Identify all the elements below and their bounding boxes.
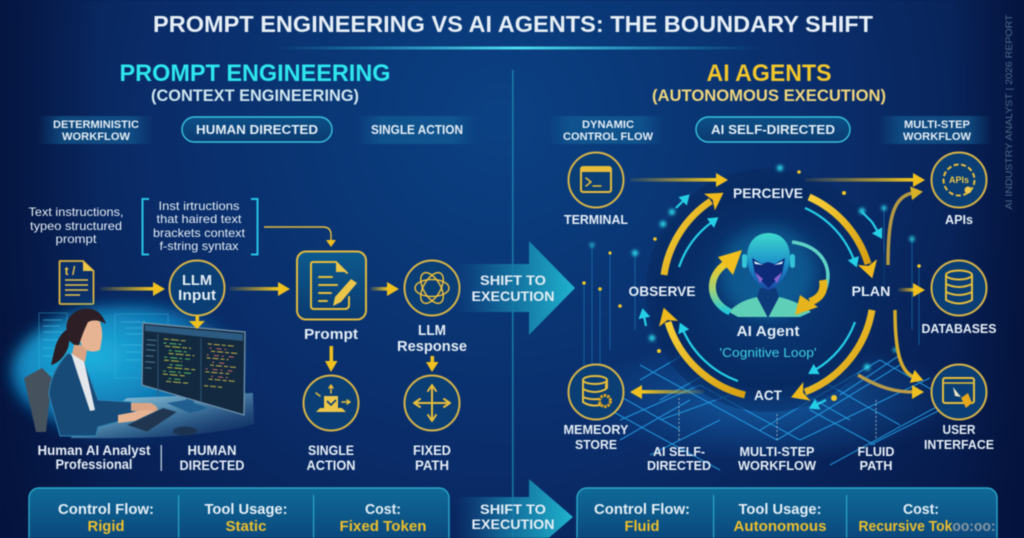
label: act: ACT (754, 387, 782, 403)
node: prompt (297, 252, 366, 343)
arrow: shift to execution: EXECUTION (472, 289, 554, 304)
tag: deterministic workflow: WORKFLOW (62, 131, 131, 143)
node: single action (304, 376, 358, 430)
metric: control flow: Fluid (624, 519, 660, 535)
node: databases (922, 260, 996, 336)
metric: control flow: Control Flow: (58, 502, 154, 518)
label: user interface: USER (942, 423, 976, 437)
labels: right column captions: PATH (860, 459, 892, 473)
arrow: act to memory store (630, 385, 704, 399)
text: typed instructions note: typeo structured (30, 219, 122, 233)
node: user interface (924, 364, 994, 452)
arrow: lower shift to execution: SHIFT TO (480, 502, 546, 517)
label: plan: PLAN (852, 283, 890, 299)
labels: left column captions: Professional (56, 457, 132, 472)
arrow: shift to execution (456, 241, 575, 335)
arrow: llm input to prompt (229, 282, 290, 296)
labels: left column captions (38, 443, 451, 473)
monitor (142, 323, 245, 415)
panel: right summary (577, 488, 997, 538)
chair (24, 368, 52, 432)
metric: tool usage: Tool Usage: (204, 502, 288, 518)
node: memory store (564, 364, 629, 452)
labels: left column captions: PATH (415, 458, 449, 473)
arrow: llm input to analyst (189, 316, 205, 329)
heading: prompt engineering: PROMPT ENGINEERING (120, 60, 390, 87)
arrow: agent swirl right (792, 242, 828, 290)
dotted leader lines (679, 398, 876, 440)
metric: control flow: Control Flow: (594, 502, 690, 518)
labels: right column captions: DIRECTED (647, 459, 711, 473)
metric: tool usage: Tool Usage: (738, 502, 822, 518)
data dots (582, 165, 921, 405)
arrow: prompt to llm response (370, 282, 399, 296)
subheading: context engineering: (CONTEXT ENGINEERING) (151, 86, 359, 105)
panel: ai agents header (548, 60, 992, 144)
node: llm response (397, 260, 467, 355)
arrow: plan to databases (898, 283, 925, 297)
labels: right column captions: AI SELF- (653, 445, 705, 459)
metric: control flow (594, 502, 690, 535)
subheading: autonomous execution: (AUTONOMOUS EXECUTION) (652, 86, 886, 105)
node: fixed path (404, 376, 460, 430)
metric: control flow: Rigid (88, 519, 124, 535)
arrow: plan to user interface (895, 310, 914, 377)
panel: cognitive loop (628, 168, 890, 412)
icon: document (60, 261, 94, 304)
ponytail (51, 327, 72, 365)
icon: document: t / (65, 264, 76, 278)
label: memory store: MEMEORY (564, 423, 629, 437)
panel: prompt engineering header (38, 60, 476, 144)
callout: bracketed instructions: f-string syntax (160, 239, 238, 253)
label: perceive: PERCEIVE (733, 185, 803, 201)
labels: left column captions: DIRECTED (180, 458, 245, 473)
arrow: plan to apis (888, 193, 913, 265)
label: observe: OBSERVE (628, 283, 696, 299)
node: llm response: Response (397, 339, 467, 355)
arrow: plan to act (805, 310, 872, 392)
text: typed instructions note (28, 205, 124, 246)
metric: cost: Cost: (903, 502, 939, 518)
tag: human directed (182, 117, 332, 142)
tag: single action (358, 116, 476, 144)
desk (70, 393, 254, 438)
labels: left column captions: SINGLE (308, 443, 354, 458)
label: terminal: TERMINAL (564, 213, 628, 227)
arrow: terminal to perceive (630, 173, 728, 187)
icon: ai agent figure (712, 226, 828, 318)
node: user interface: INTERFACE (924, 438, 994, 452)
arrow: prompt to single action (325, 346, 338, 372)
title: PROMPT ENGINEERING VS AI AGENTS: THE BOUNDARY SHIFT (153, 11, 873, 37)
metric: cost (858, 502, 996, 535)
arrow: act to observe (668, 322, 745, 395)
labels: left column captions: HUMAN (188, 443, 236, 458)
monitor stand (167, 393, 208, 413)
metric: cost: Cost: (365, 502, 401, 518)
side note: report source: AI INDUSTRY ANALYST | 2026 REPORT (1004, 14, 1015, 210)
arrow: observe to perceive (664, 201, 711, 275)
jacket (49, 353, 134, 436)
metric: tool usage: Autonomous (734, 519, 826, 535)
labels: right column captions: FLUID (858, 445, 894, 459)
panel: left summary (29, 488, 449, 538)
arrow: instructions to prompt (264, 227, 336, 247)
metric: tool usage: Static (226, 519, 266, 535)
node: terminal (564, 152, 628, 227)
label: apis: APIs (945, 213, 973, 227)
labels: left column captions: FIXED (413, 443, 451, 458)
arrow: grid to user interface (858, 375, 914, 392)
labels: left column captions: ACTION (306, 458, 356, 473)
node: apis: APIs (949, 175, 969, 185)
tag: deterministic workflow (38, 116, 154, 144)
illustration: analyst at workstation (12, 306, 254, 438)
forearm and hand (118, 408, 160, 423)
tag: dynamic control flow (548, 116, 664, 144)
node: memory store: STORE (575, 438, 617, 452)
label: cognitive loop: 'Cognitive Loop' (720, 346, 816, 360)
arrow: lower shift to execution: EXECUTION (472, 517, 554, 532)
text: typed instructions note: Text instructions, (28, 205, 124, 219)
tag: human directed: HUMAN DIRECTED (196, 122, 318, 137)
text: typed instructions note: prompt (56, 232, 97, 246)
tag: ai self-directed: AI SELF-DIRECTED (711, 122, 835, 137)
hair (66, 309, 106, 345)
metric: cost: Fixed Token (340, 519, 426, 535)
label: prompt: Prompt (304, 327, 358, 343)
metric: tool usage (204, 502, 288, 535)
heading: ai agents: AI AGENTS (706, 60, 832, 87)
label: ai agent: AI Agent (736, 324, 800, 340)
tag: dynamic control flow: DYNAMIC (582, 119, 634, 131)
label: databases: DATABASES (922, 322, 996, 336)
labels: left column captions: Human AI Analyst (38, 443, 151, 458)
arrow: perceive to plan (809, 197, 868, 264)
arrow: llm response to fixed path (426, 356, 438, 372)
node: llm input: LLM (182, 273, 212, 289)
metric: tool usage (734, 502, 826, 535)
labels: right column captions: MULTI-STEP (740, 445, 814, 459)
tag: multi-step workflow: WORKFLOW (903, 131, 972, 143)
callout: bracketed instructions: brackets context (153, 226, 246, 240)
keyboard (127, 408, 177, 432)
node: apis (932, 152, 986, 227)
metric: cost: Recursive Tokoo:oo: (858, 519, 996, 535)
arrow: shift to execution: SHIFT TO (480, 273, 546, 288)
arrow: agent swirl left (712, 263, 730, 312)
tag: ai self-directed (696, 117, 850, 142)
label: llm response: LLM (418, 323, 446, 339)
node: llm input (170, 260, 224, 316)
network grid backdrop (580, 208, 960, 470)
arrow: lower shift to execution (456, 479, 573, 538)
tag: dynamic control flow: CONTROL FLOW (563, 131, 654, 143)
callout: bracketed instructions: that haired text (156, 212, 242, 226)
arrows: inner cyan loop (679, 208, 855, 381)
mouse (173, 426, 197, 436)
tag: single action: SINGLE ACTION (371, 123, 463, 137)
callout: bracketed instructions: Inst irtructions (158, 199, 240, 213)
tag: multi-step workflow: MULTI-STEP (904, 119, 970, 131)
labels: right column captions: WORKFLOW (738, 459, 816, 473)
node: llm input: Input (178, 288, 216, 304)
labels: right column captions (647, 445, 894, 473)
tag: deterministic workflow: DETERMINISTIC (53, 119, 139, 131)
tag: multi-step workflow (878, 116, 992, 144)
arrow: perceive to apis (805, 173, 925, 187)
arrow: document to llm input (100, 282, 165, 296)
shirt (71, 353, 95, 411)
neck and face (72, 345, 88, 362)
callout: bracketed instructions (142, 199, 258, 254)
metric: control flow (58, 502, 154, 535)
metric: cost (340, 502, 426, 535)
